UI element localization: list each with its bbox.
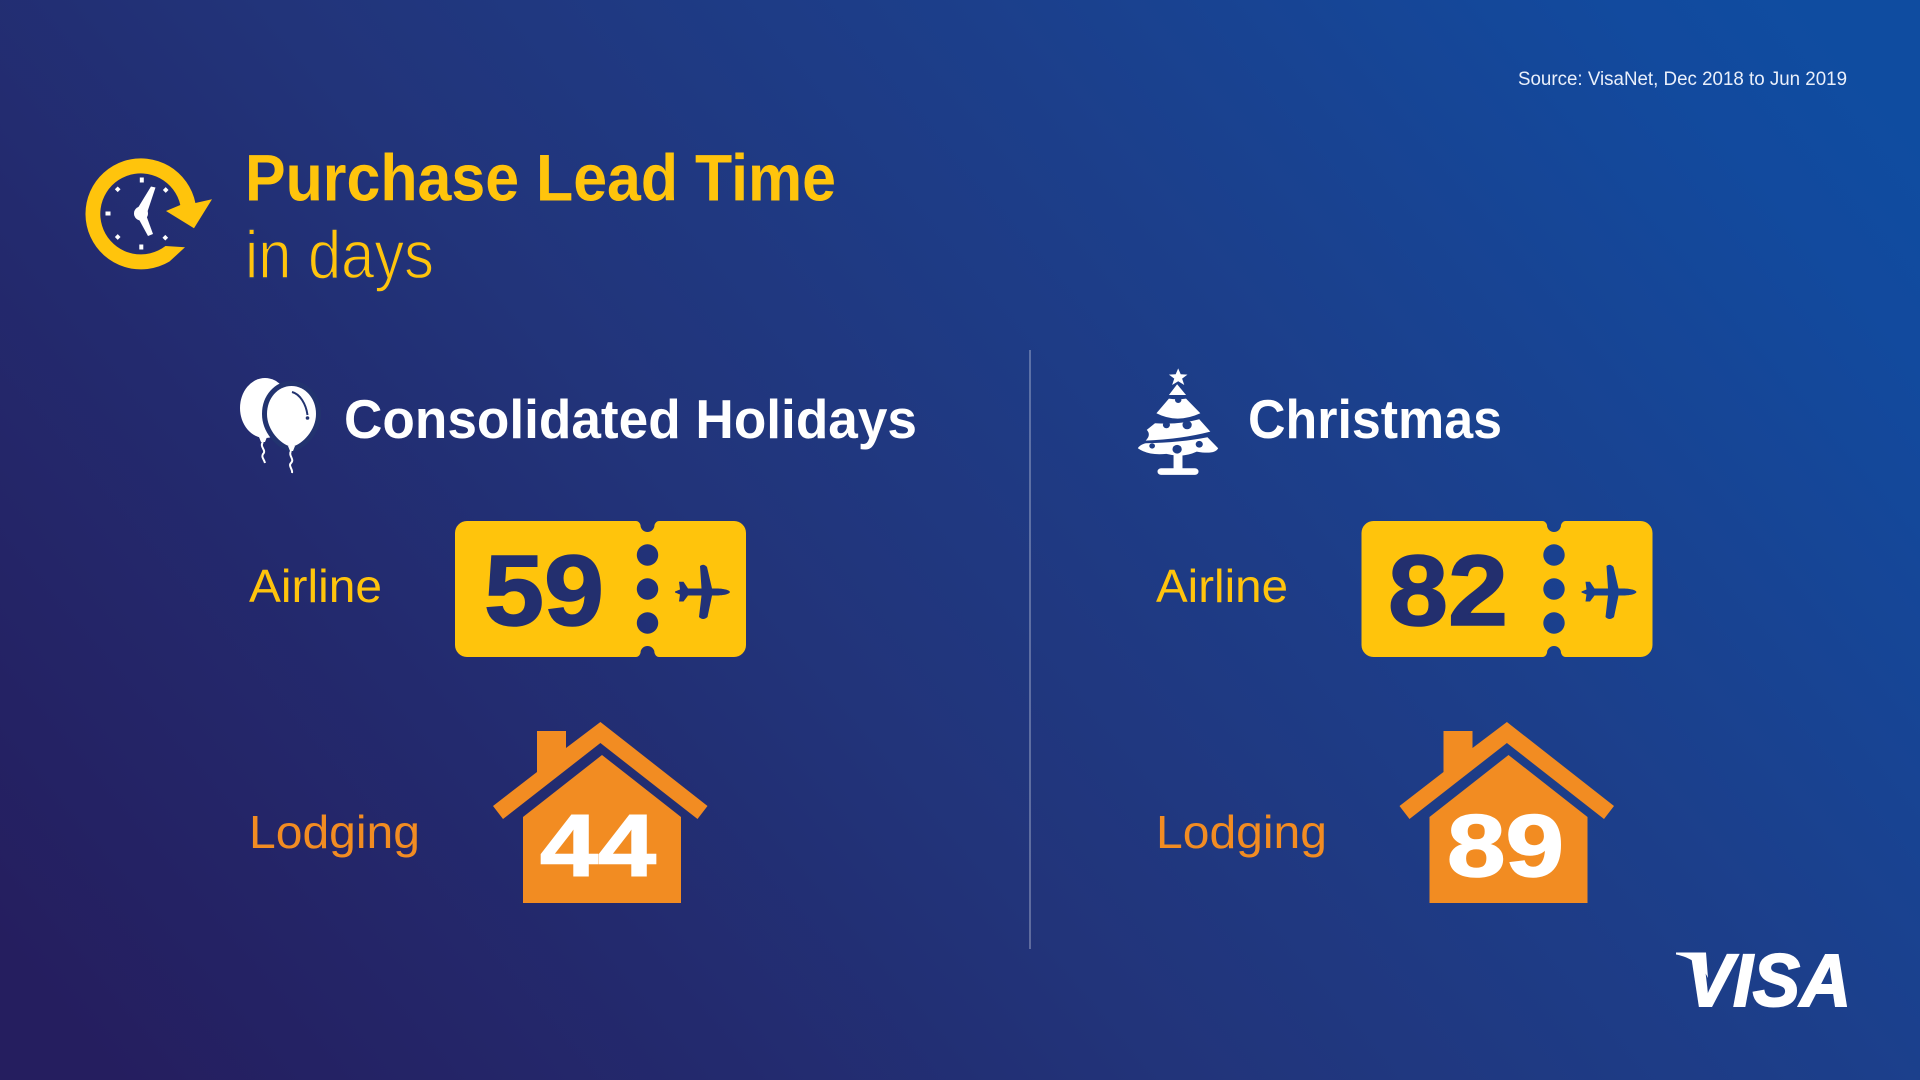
label: lodging: Lodging: [249, 806, 420, 858]
subtitle: in days: [245, 217, 434, 293]
ticket: airline 59: [455, 521, 746, 657]
house: lodging 89: [1400, 722, 1614, 903]
source note: Source: VisaNet, Dec 2018 to Jun 2019: [1518, 68, 1847, 90]
icon: balloons: [240, 378, 316, 473]
label: airline: Airline: [1156, 560, 1288, 612]
panel: consolidated holidays: [240, 378, 917, 903]
house: lodging 44: 44: [540, 796, 656, 895]
heading: Christmas: [1248, 388, 1502, 450]
heading: Consolidated Holidays: [344, 388, 917, 450]
icon: clock with circular arrow: [85, 158, 212, 269]
house: lodging 44: [493, 722, 708, 903]
title: Purchase Lead Time: [245, 140, 836, 214]
ticket: airline 82: [1362, 521, 1652, 657]
label: lodging: Lodging: [1156, 806, 1327, 858]
label: airline: Airline: [249, 560, 382, 612]
logo: VISA: VISA: [1686, 939, 1851, 1022]
house: lodging 89: 89: [1447, 796, 1564, 895]
icon: christmas tree: [1138, 368, 1218, 475]
ticket: airline 82: 82: [1388, 535, 1508, 647]
ticket: airline 59: 59: [484, 535, 604, 647]
divider: [1029, 350, 1031, 949]
panel: christmas: [1138, 368, 1652, 903]
